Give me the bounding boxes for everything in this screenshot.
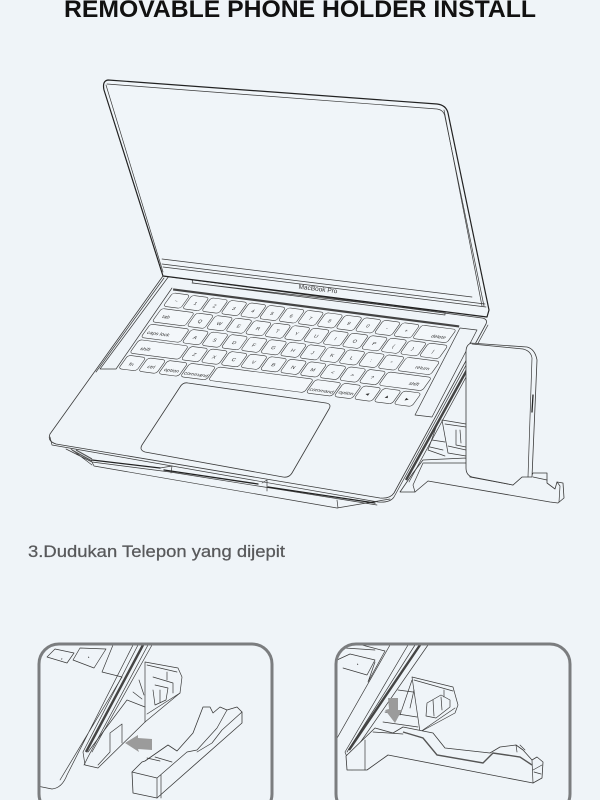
row 3 keys: caps lock xyxy=(145,331,171,338)
attached phone holder xyxy=(346,727,543,783)
row 1 keys: 3 xyxy=(230,307,237,312)
laptop base top deck xyxy=(49,276,486,498)
row 1 keys: ~ xyxy=(173,299,179,304)
row 2 keys: W xyxy=(215,322,223,327)
row 5 keys: ctrl xyxy=(146,365,156,370)
row 4 keys: > xyxy=(349,373,355,378)
row 4 keys xyxy=(130,340,432,391)
row 5 keys xyxy=(118,355,421,407)
row 3 keys: A xyxy=(191,336,199,341)
row 3 keys: K xyxy=(328,353,336,359)
row 4 keys: B xyxy=(269,363,277,368)
panel: remove holder detail xyxy=(37,644,272,800)
row 2 keys: Y xyxy=(293,332,300,337)
row 2 keys: } xyxy=(410,347,415,352)
row 5 keys: ◄ xyxy=(362,392,371,397)
row 2 keys xyxy=(152,308,448,359)
right side strip xyxy=(415,328,477,417)
laptop base underside xyxy=(66,449,390,508)
row 1 keys: - xyxy=(384,326,390,332)
arrow pointing left xyxy=(125,735,152,752)
row 3 keys: H xyxy=(289,348,296,354)
row 5 keys: option xyxy=(162,368,180,374)
close-up stand body xyxy=(383,677,458,732)
close-up laptop edge xyxy=(336,645,428,770)
row 4 keys: shift xyxy=(138,347,152,353)
panel frame xyxy=(336,644,570,800)
row 3 keys: D xyxy=(230,341,238,346)
detached phone holder xyxy=(132,707,242,798)
row 2 keys: R xyxy=(254,327,261,332)
row 2 keys: I xyxy=(333,337,338,342)
row 2 keys: | xyxy=(430,349,435,354)
row 4 keys: shift xyxy=(407,381,421,388)
row 4 keys: X xyxy=(210,355,218,360)
row 3 keys: F xyxy=(250,343,257,348)
left speaker strip xyxy=(96,276,172,372)
row 5 keys: option xyxy=(337,390,355,397)
row 3 keys: " xyxy=(388,361,393,366)
row 4 keys: V xyxy=(250,360,257,366)
row 3 keys: G xyxy=(269,346,277,351)
row 3 keys: : xyxy=(368,359,373,364)
close-up keys xyxy=(337,645,385,682)
row 5 keys: command xyxy=(308,387,335,395)
arrow pointing down xyxy=(385,698,402,723)
row 5 keys: ► xyxy=(402,397,411,403)
phone xyxy=(466,343,537,485)
base front edge xyxy=(50,325,488,502)
hinge-side dark band xyxy=(406,368,468,480)
row 2 keys: { xyxy=(391,344,396,349)
row 1 keys: 0 xyxy=(364,324,371,329)
row 4 keys: N xyxy=(289,365,297,371)
stand mechanism behind laptop xyxy=(428,420,466,456)
close-up laptop edge xyxy=(37,645,152,789)
hinge recess xyxy=(192,279,445,315)
row 4 keys: < xyxy=(329,370,335,376)
row 4 keys: M xyxy=(309,368,316,373)
row 2 keys: U xyxy=(312,334,320,340)
row 5 keys: ▲ xyxy=(382,394,391,400)
row 4 keys: ? xyxy=(369,376,375,381)
row 3 keys xyxy=(141,324,440,375)
illustration: laptop on stand with phone holder xyxy=(49,80,564,508)
panel frame xyxy=(39,644,272,800)
row 1 keys: 2 xyxy=(211,304,217,309)
row 1 keys: 1 xyxy=(192,302,198,307)
laptop lid xyxy=(104,80,489,317)
close-up keys: ▾ xyxy=(61,657,63,661)
close-up keys: ▸ xyxy=(88,655,90,659)
row 2 keys: T xyxy=(274,329,281,335)
row 3 keys: return xyxy=(414,365,431,372)
touch bar band xyxy=(173,289,459,326)
row 3 keys: L xyxy=(348,356,355,361)
row 5 keys: command xyxy=(182,371,209,379)
row 4 keys: Z xyxy=(191,353,198,358)
row 2 keys: tab xyxy=(160,315,171,320)
row 5 keys: fn xyxy=(127,362,135,368)
row 3 keys: S xyxy=(211,338,218,343)
close-up keys: ▸ xyxy=(357,662,359,666)
row 2 keys: E xyxy=(235,324,242,330)
row 4 keys: C xyxy=(230,358,237,363)
row 1 keys: 4 xyxy=(249,309,256,314)
row 1 keys: 8 xyxy=(326,319,332,324)
row 2 keys: O xyxy=(351,339,358,345)
row 1 keys: + xyxy=(403,329,409,334)
keyboard xyxy=(116,289,468,407)
trackpad xyxy=(141,383,330,477)
laptop model label: MacBook Pro xyxy=(298,284,338,295)
phone holder stand xyxy=(400,458,564,503)
instruction caption: 3.Dudukan Telepon yang dijepit xyxy=(28,543,285,561)
row 3 keys: J xyxy=(309,351,316,356)
row 1 keys: 7 xyxy=(307,316,313,322)
close-up keys xyxy=(47,645,122,677)
row 1 keys xyxy=(163,293,456,343)
row 2 keys: P xyxy=(370,342,378,347)
row 1 keys: 9 xyxy=(345,321,352,327)
row 2 keys: Q xyxy=(196,319,203,324)
panel: attach holder detail xyxy=(336,644,570,800)
row 1 keys: 5 xyxy=(268,311,275,317)
close-up stand body xyxy=(88,662,182,765)
row 1 keys: delete xyxy=(429,334,447,341)
row 1 keys: 6 xyxy=(288,314,294,319)
